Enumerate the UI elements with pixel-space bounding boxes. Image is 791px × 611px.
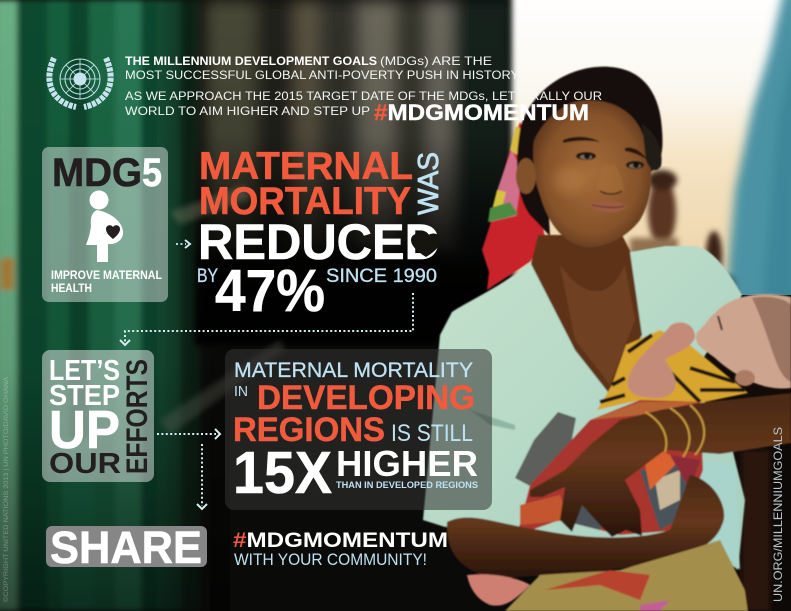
panel: developing regions statistic: IN bbox=[234, 383, 248, 400]
headscarf bbox=[482, 122, 545, 290]
cheek highlight bbox=[554, 166, 586, 194]
UN emblem bbox=[49, 58, 111, 107]
shirt bbox=[423, 246, 745, 570]
panel: developing regions statistic: 15X bbox=[233, 440, 332, 506]
headline: maternal mortality reduced: 47% bbox=[215, 258, 325, 324]
share hashtag: #MDGMOMENTUM bbox=[233, 529, 448, 552]
badge caption: HEALTH bbox=[51, 283, 92, 295]
goal number: 5 bbox=[142, 151, 162, 195]
bangles bbox=[645, 405, 704, 457]
eyebrows and eyes bbox=[563, 137, 648, 169]
headline: maternal mortality reduced: MATERNAL bbox=[199, 145, 413, 188]
headline: maternal mortality reduced: SINCE 1990 bbox=[326, 266, 437, 287]
intro text: AS WE APPROACH THE 2015 TARGET DATE OF THE MDGs, LET'S RALLY OUR bbox=[125, 89, 602, 103]
panel: developing regions statistic: REGIONS bbox=[233, 411, 385, 449]
panel: developing regions statistic: DEVELOPING bbox=[257, 379, 475, 417]
baby arm and hand bbox=[628, 322, 695, 398]
panel: share: SHARE bbox=[50, 522, 202, 573]
panel: let's step up our efforts: LET’S bbox=[49, 355, 120, 387]
intro text: (MDGs) ARE THE bbox=[380, 54, 492, 68]
baby body bbox=[597, 330, 748, 410]
hair over forehead bbox=[520, 67, 662, 150]
intro text: THE MILLENNIUM DEVELOPMENT GOALS bbox=[125, 54, 377, 68]
baby foot bbox=[467, 574, 530, 606]
mother's lower arm bbox=[447, 475, 724, 578]
icon: pregnant woman bbox=[86, 190, 123, 262]
wreath leaves bbox=[49, 58, 111, 107]
headline: maternal mortality reduced: MORTALITY bbox=[199, 180, 411, 223]
shirt fold bbox=[470, 410, 515, 430]
panel: developing regions statistic: HIGHER bbox=[336, 443, 478, 484]
headline: maternal mortality reduced bbox=[197, 145, 445, 324]
gray cloth bbox=[515, 412, 576, 486]
photo: mother and baby bbox=[423, 67, 791, 611]
headline: maternal mortality reduced: REDUCED bbox=[198, 214, 440, 270]
headline: maternal mortality reduced: BY bbox=[197, 266, 218, 287]
ear bbox=[516, 158, 536, 194]
website url: UN.ORG/MILLENNIUMGOALS bbox=[771, 427, 785, 602]
badge caption: IMPROVE MATERNAL bbox=[51, 270, 162, 282]
arrow: badge to headline bbox=[176, 240, 190, 248]
panel: let's step up our efforts: STEP bbox=[49, 380, 120, 412]
panel: developing regions statistic bbox=[225, 349, 492, 510]
hair bbox=[517, 67, 662, 236]
baby head bbox=[696, 294, 791, 389]
panel: developing regions statistic: MATERNAL MORTALITY bbox=[234, 359, 473, 382]
icon: heart in the D bbox=[411, 233, 441, 257]
panel: developing regions statistic: IS STILL bbox=[391, 420, 473, 447]
header hashtag: #MDGMOMENTUM bbox=[374, 100, 589, 125]
arrow: step up to statistic bbox=[157, 429, 220, 439]
badge caption bbox=[51, 270, 162, 295]
arrow: headline down to step up panel bbox=[120, 293, 413, 345]
share hashtag bbox=[233, 529, 448, 569]
panel: MDG5 badge bbox=[42, 147, 168, 302]
panel: let's step up our efforts: EFFORTS bbox=[121, 359, 154, 474]
panel: let's step up our efforts: UP bbox=[49, 400, 120, 460]
mother's upper arm and hand bbox=[530, 393, 791, 537]
nose and mouth bbox=[588, 165, 628, 212]
background: bright doorway and turquoise cloth bbox=[512, 0, 791, 611]
patterned wrap bbox=[517, 400, 703, 535]
headline: maternal mortality reduced: WAS bbox=[413, 152, 445, 215]
face bbox=[533, 100, 651, 247]
photo credit: ©COPYRIGHT UNITED NATIONS 2013 | UN PHOTO/DAVID OHANA bbox=[3, 377, 10, 602]
share hashtag: WITH YOUR COMMUNITY! bbox=[234, 550, 427, 569]
panel: developing regions statistic: THAN IN DEVELOPED REGIONS bbox=[336, 480, 478, 491]
MDG label: MDG bbox=[52, 151, 142, 195]
arrow: step up down to share bbox=[197, 444, 207, 509]
intro text: MOST SUCCESSFUL GLOBAL ANTI-POVERTY PUSH IN HISTORY. bbox=[125, 68, 521, 82]
skirt bbox=[505, 540, 748, 611]
intro text: WORLD TO AIM HIGHER AND STEP UP bbox=[125, 104, 370, 118]
panel: let's step up our efforts: OUR bbox=[49, 448, 121, 480]
panel: let's step up our efforts bbox=[42, 350, 154, 482]
intro text bbox=[125, 54, 602, 118]
neck bbox=[530, 235, 642, 392]
